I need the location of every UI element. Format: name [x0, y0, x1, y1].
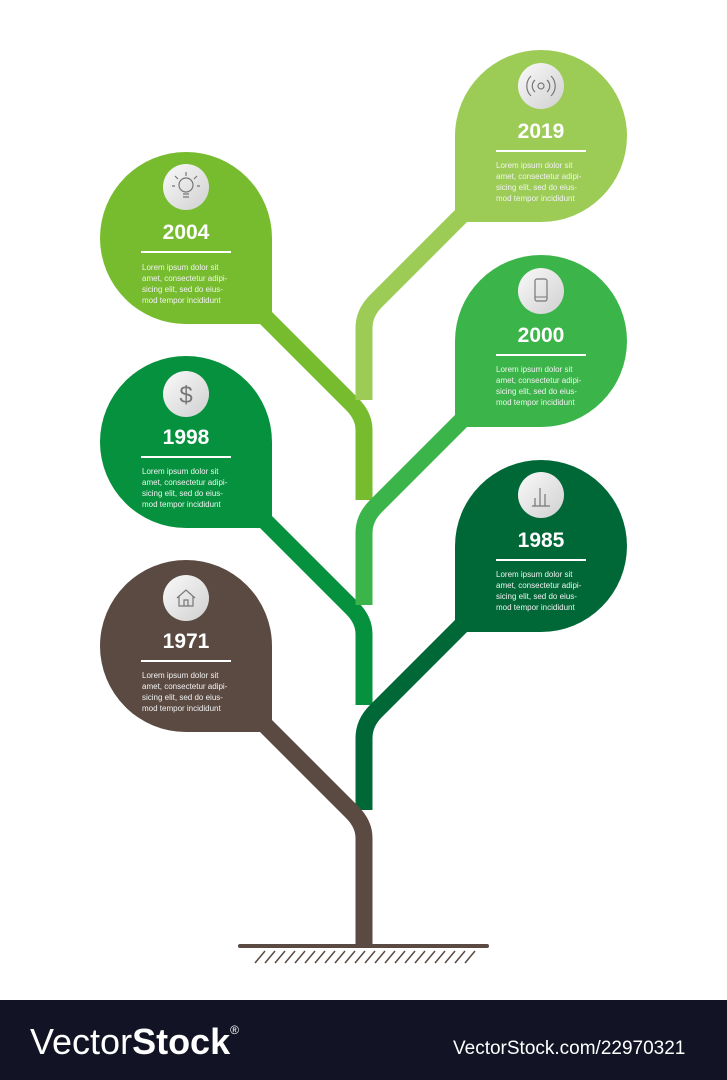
bubble: 2004 — [100, 152, 272, 324]
icon: phone — [518, 268, 564, 314]
bubble: 1971: Lorem ipsum dolor sit — [142, 671, 219, 680]
bubble: 1985: Lorem ipsum dolor sit — [496, 570, 573, 579]
bubble: 1998: mod tempor incididunt — [142, 500, 221, 509]
bubble: 1985 — [455, 460, 627, 632]
bubble: 2019: Lorem ipsum dolor sit — [496, 161, 573, 170]
bubble: 2019: amet, consectetur adipi- — [496, 172, 582, 181]
branch: 1998 — [266, 522, 364, 705]
bubble: 2004: sicing elit, sed do eius- — [142, 285, 223, 294]
icon: light bulb — [163, 164, 209, 210]
watermark bar: ® — [230, 1023, 239, 1037]
bubble: 2004: mod tempor incididunt — [142, 296, 221, 305]
icon: bar chart — [518, 472, 564, 518]
branch: 2000 — [364, 421, 461, 605]
branch: 2019 — [364, 216, 461, 400]
bubble: 2000 — [455, 255, 627, 427]
bubble: 1971: sicing elit, sed do eius- — [142, 693, 223, 702]
icon: dollar — [163, 371, 209, 417]
bubble: 2000: sicing elit, sed do eius- — [496, 387, 577, 396]
bubble: 1998: Lorem ipsum dolor sit — [142, 467, 219, 476]
bubble: 1998: sicing elit, sed do eius- — [142, 489, 223, 498]
bubble: 1971 — [100, 560, 272, 732]
icon: wireless — [518, 63, 564, 109]
bubble: 2004: Lorem ipsum dolor sit — [142, 263, 219, 272]
bubble: 1985: amet, consectetur adipi- — [496, 581, 582, 590]
bubble: 1998 — [100, 356, 272, 528]
bubble: 2000: Lorem ipsum dolor sit — [496, 365, 573, 374]
trunk: 1971 — [266, 726, 364, 946]
watermark bar: VectorStock.com/22970321 — [453, 1038, 685, 1059]
bubble: 2000: amet, consectetur adipi- — [496, 376, 582, 385]
bubble: 1998: amet, consectetur adipi- — [142, 478, 228, 487]
bubble: 1985: mod tempor incididunt — [496, 603, 575, 612]
branch: 1985 — [364, 626, 461, 810]
bubble: 1998: 1998 — [163, 426, 210, 449]
bubble: 2019 — [455, 50, 627, 222]
bubble: 1971: mod tempor incididunt — [142, 704, 221, 713]
bubble: 2004: 2004 — [163, 221, 210, 244]
watermark bar — [0, 1000, 727, 1080]
icon: house — [163, 575, 209, 621]
bubble: 1985: sicing elit, sed do eius- — [496, 592, 577, 601]
bubble: 2004: amet, consectetur adipi- — [142, 274, 228, 283]
bubble: 1971: amet, consectetur adipi- — [142, 682, 228, 691]
bubble: 1971: 1971 — [163, 630, 210, 653]
icon: dollar: $ — [179, 382, 193, 409]
bubble: 2019: 2019 — [518, 120, 564, 143]
bubble: 2000: mod tempor incididunt — [496, 398, 575, 407]
bubble: 2019: mod tempor incididunt — [496, 194, 575, 203]
bubble: 2000: 2000 — [518, 324, 564, 347]
ground — [240, 946, 487, 963]
bubble: 1985: 1985 — [518, 529, 565, 552]
bubble: 2019: sicing elit, sed do eius- — [496, 183, 577, 192]
branch: 2004 — [266, 318, 364, 500]
watermark bar: VectorStock — [30, 1021, 230, 1062]
